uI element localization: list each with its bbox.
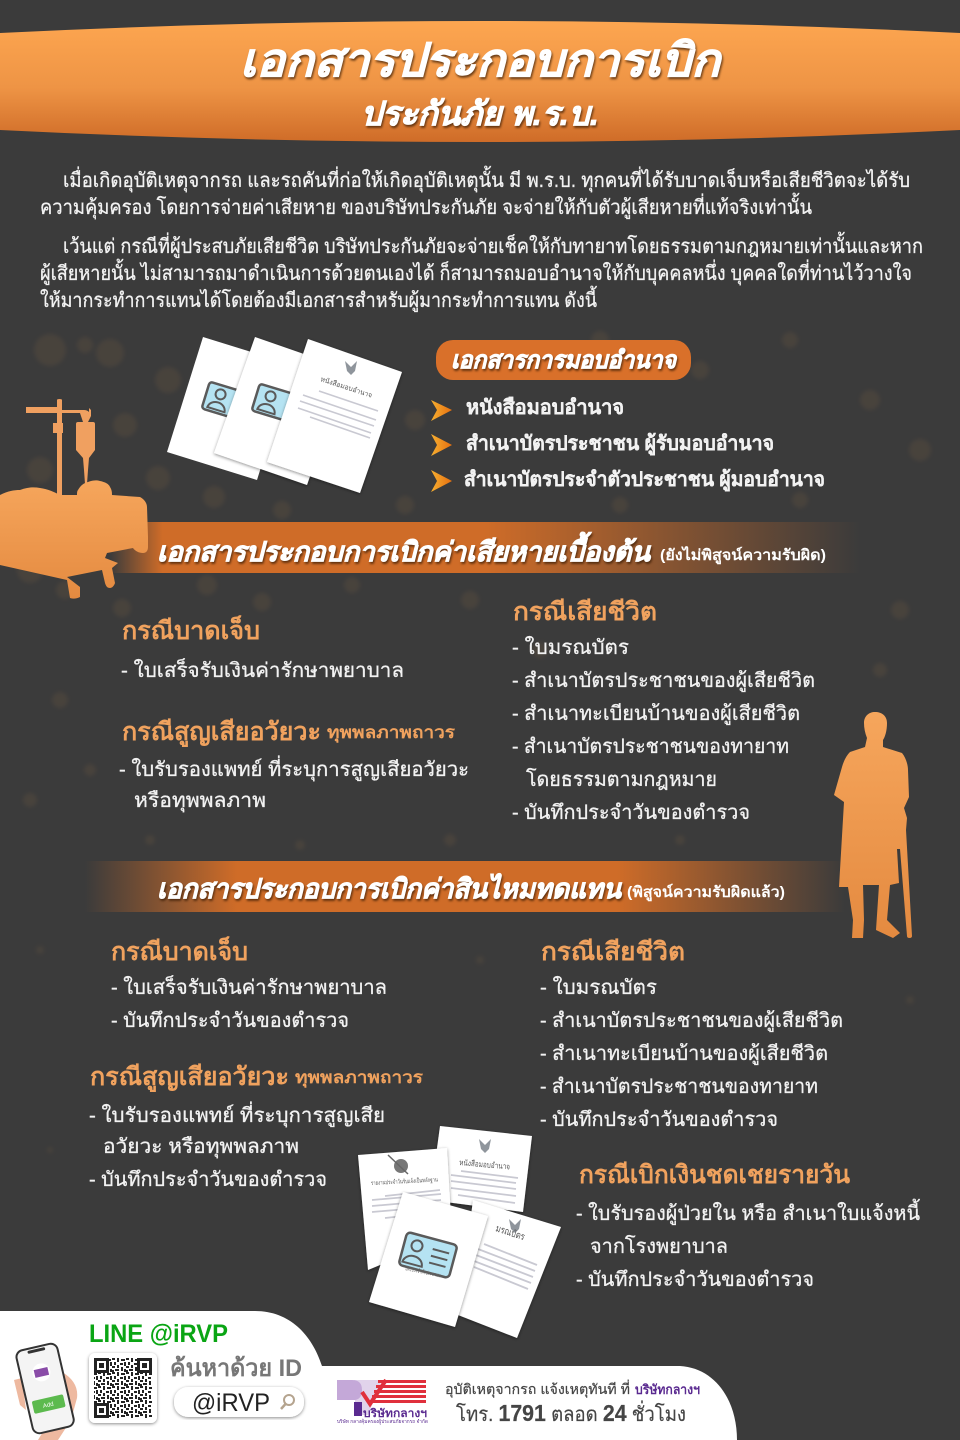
icon: claim documents pile: หนังสือมอบอำนาจ [459, 1158, 511, 1171]
header banner [0, 21, 960, 142]
section: death (initial): - บันทึกประจำวันของตำรวจ [512, 802, 750, 824]
intro text [40, 166, 923, 313]
icon: power of attorney documents [167, 337, 402, 493]
icon: claim documents pile [358, 1126, 561, 1338]
section: loss of organ (initial): กรณีสูญเสียอวัยวะ [122, 718, 321, 748]
section: injury (initial): กรณีบาดเจ็บ [122, 615, 260, 645]
section: loss of organ (initial): - ใบรับรองแพทย์ ที่ระบุการสูญเสียอวัยวะ [119, 755, 469, 782]
intro text: ความคุ้มครอง โดยการจ่ายค่าเสียหาย ของบริษัทประกันภัย จะจ่ายให้กับตัวผู้เสียหายที่แท้จริงเท่านั้น [40, 193, 812, 220]
list: power of attorney documents: สำเนาบัตรประจำตัวประชาชน ผู้มอบอำนาจ [464, 468, 825, 493]
section: death (initial): - สำเนาบัตรประชาชนของทายาท [512, 736, 789, 758]
search by ID label: ค้นหาด้วย ID [170, 1355, 302, 1382]
hotline text: โทร. 1791 ตลอด 24 ชั่วโมง [456, 1400, 686, 1426]
hotline text: บริษัทกลางฯ [635, 1382, 700, 1397]
icon: claim documents pile: รายงานประจำวันรับแจ้งเป็นหลักฐาน [371, 1175, 438, 1187]
list: power of attorney documents [431, 396, 825, 493]
band 1: initial damages [110, 522, 860, 573]
section: daily compensation: - ใบรับรองผู้ป่วยใน หรือ สำเนาใบแจ้งหนี้ [576, 1199, 920, 1226]
section: daily compensation: - บันทึกประจำวันของตำรวจ [576, 1269, 814, 1291]
section: injury (compensation) [111, 936, 387, 1032]
section: death (initial): - สำเนาบัตรประชาชนของผู้เสียชีวิต [512, 670, 815, 693]
subtitle: ประกันภัย พ.ร.บ. [361, 95, 599, 132]
section: injury (compensation): กรณีบาดเจ็บ [111, 936, 248, 966]
list: power of attorney documents: สำเนาบัตรประชาชน ผู้รับมอบอำนาจ [466, 432, 774, 457]
icon: claim documents pile: บัตรประจำตัวประชาชน [405, 1265, 441, 1279]
hotline text: อุบัติเหตุจากรถ แจ้งเหตุทันที ที่ [445, 1380, 630, 1398]
section: daily compensation: จากโรงพยาบาล [590, 1235, 728, 1258]
section: death (initial): โดยธรรมตามกฎหมาย [526, 768, 717, 791]
icon: phone in hand [14, 1342, 77, 1440]
icon: arrow bullet 1 [431, 400, 452, 421]
section: death (compensation): - บันทึกประจำวันของตำรวจ [540, 1109, 778, 1131]
section: death (compensation): กรณีเสียชีวิต [541, 938, 685, 966]
heading pill: power of attorney documents [436, 340, 691, 380]
section: loss of organ (compensation): ทุพพลภาพถาวร [295, 1068, 424, 1088]
section: injury (initial): - ใบเสร็จรับเงินค่ารักษาพยาบาล [121, 657, 404, 682]
section: death (compensation): - สำเนาบัตรประชาชนของผู้เสียชีวิต [540, 1010, 843, 1033]
band 2: compensation: (พิสูจน์ความรับผิดแล้ว) [627, 883, 785, 902]
footer: white panels [0, 1311, 737, 1440]
band 2: compensation [85, 861, 845, 912]
line heading: LINE @iRVP [89, 1320, 228, 1348]
icon: hospital bed silhouette [0, 399, 148, 599]
section: loss of organ (compensation): - บันทึกประจำวันของตำรวจ [89, 1169, 327, 1191]
section: loss of organ (initial): ทุพพลภาพถาวร [327, 723, 456, 743]
title: เอกสารประกอบการเบิก [240, 34, 723, 86]
section: loss of organ (initial): หรือทุพพลภาพ [134, 790, 266, 813]
band 1: initial damages: เอกสารประกอบการเบิกค่าเสียหายเบื้องต้น [157, 531, 652, 567]
icon: elderly person with cane silhouette [834, 712, 912, 938]
icon: phone in hand: Add [43, 1402, 54, 1410]
ID search pill [174, 1387, 304, 1417]
intro text: ให้มากระทำการแทนได้โดยต้องมีเอกสารสำหรับผู้มากระทำการแทน ดังนี้ [40, 286, 597, 313]
heading pill: power of attorney documents: เอกสารการมอบอำนาจ [451, 347, 678, 374]
section: death (compensation): - สำเนาทะเบียนบ้านของผู้เสียชีวิต [540, 1043, 828, 1066]
logo [337, 1380, 428, 1425]
section: loss of organ (compensation): อวัยวะ หรือทุพพลภาพ [103, 1136, 299, 1159]
icon: magnifier [281, 1395, 294, 1409]
icon: claim documents pile: มรณบัตร [494, 1223, 526, 1243]
band 2: compensation: เอกสารประกอบการเบิกค่าสินไหมทดแทน [157, 873, 622, 904]
section: death (initial): - ใบมรณบัตร [512, 636, 629, 659]
intro text: เมื่อเกิดอุบัติเหตุจากรถ และรถคันที่ก่อให้เกิดอุบัติเหตุนั้น มี พ.ร.บ. ทุกคนที่ได้รับบาดเจ็บหรือเสียชีวิตจะได้รับ [63, 166, 910, 193]
list: power of attorney documents: หนังสือมอบอำนาจ [466, 396, 624, 419]
section: death (initial): กรณีเสียชีวิต [513, 598, 657, 626]
section: death (initial) [512, 598, 815, 824]
section: loss of organ (initial) [119, 718, 469, 813]
band 1: initial damages: (ยังไม่พิสูจน์ความรับผิด) [660, 545, 826, 565]
icon: arrow bullet 2 [431, 434, 452, 456]
QR code [89, 1353, 157, 1423]
logo: บริษัท กลางคุ้มครองผู้ประสบภัยจากรถ จำกัด [337, 1418, 428, 1425]
logo: บริษัทกลางฯ [363, 1407, 427, 1420]
ID search pill: @iRVP [192, 1389, 270, 1417]
section: injury (compensation): - บันทึกประจำวันของตำรวจ [111, 1010, 349, 1032]
section: daily compensation: กรณีเบิกเงินชดเชยรายวัน [579, 1161, 850, 1189]
section: loss of organ (compensation) [89, 1063, 424, 1191]
section: death (initial): - สำเนาทะเบียนบ้านของผู้เสียชีวิต [512, 703, 800, 726]
section: death (compensation): - ใบมรณบัตร [540, 976, 657, 999]
section: death (compensation): - สำเนาบัตรประชาชนของทายาท [540, 1076, 818, 1098]
hotline text [445, 1380, 700, 1426]
icon: arrow bullet 3 [431, 470, 452, 492]
section: daily compensation [576, 1161, 920, 1291]
section: injury (compensation): - ใบเสร็จรับเงินค่ารักษาพยาบาล [111, 974, 387, 999]
section: loss of organ (compensation): - ใบรับรองแพทย์ ที่ระบุการสูญเสีย [89, 1101, 385, 1128]
section: injury (initial) [121, 615, 404, 682]
icon: power of attorney documents: หนังสือมอบอำนาจ [319, 375, 373, 400]
section: death (compensation) [540, 938, 843, 1131]
section: loss of organ (compensation): กรณีสูญเสียอวัยวะ [90, 1063, 289, 1093]
